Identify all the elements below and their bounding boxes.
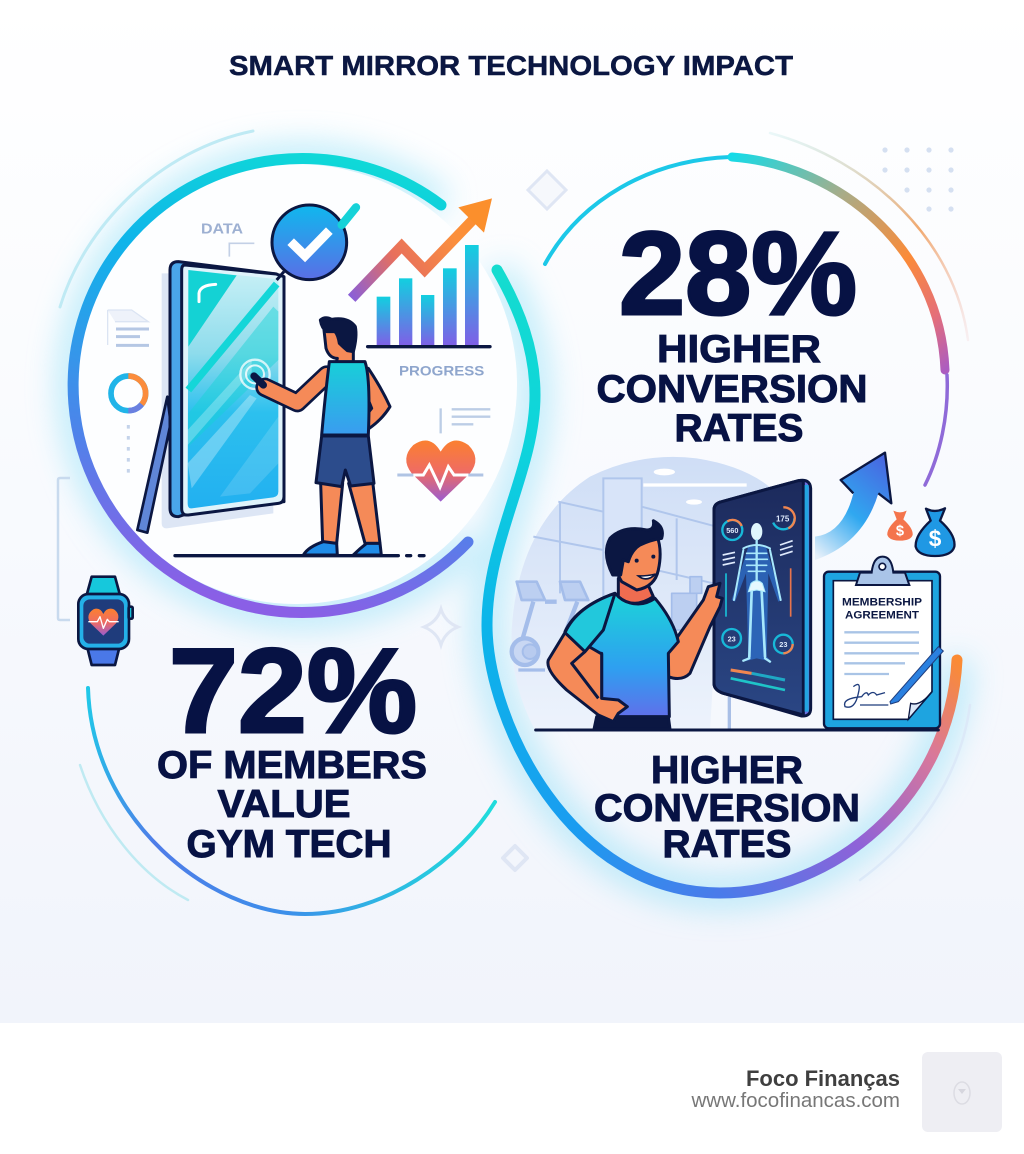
label: PROGRESS: PROGRESS	[399, 362, 484, 378]
gauge lower left	[722, 629, 741, 648]
soft glow behind rings	[73, 158, 957, 893]
S curve ring	[487, 270, 957, 893]
arc: outer faint left	[60, 131, 253, 307]
decorative shapes	[58, 171, 566, 870]
tablet readouts	[722, 507, 795, 690]
tablet edge	[801, 485, 813, 712]
small diamond	[503, 846, 527, 870]
data ticks	[723, 541, 793, 565]
label: DATA: DATA	[201, 222, 243, 238]
shorts band	[594, 717, 670, 729]
stat label: higher conversion rates lower: HIGHER	[651, 749, 803, 792]
raised arm	[667, 583, 722, 679]
arc: left circle ring	[73, 158, 468, 612]
text lines	[441, 408, 490, 433]
face	[615, 535, 660, 590]
gauge lower right: 23	[779, 640, 787, 649]
clipboard	[824, 557, 943, 728]
arm reaching	[254, 375, 327, 403]
treadmills and equipment	[512, 577, 702, 670]
gym background	[512, 457, 777, 730]
footer brand name: Foco Finanças	[746, 1066, 900, 1091]
mirror shadow	[162, 273, 273, 528]
dotted line	[124, 425, 133, 480]
hip arm	[548, 633, 627, 722]
ceiling lights	[654, 469, 702, 505]
stat: 72%: 72%	[169, 624, 417, 758]
tablet stand	[724, 697, 734, 729]
figure: man at mirror	[303, 318, 390, 555]
pen	[890, 647, 943, 704]
inner arm line	[572, 652, 598, 698]
dot grid	[882, 147, 954, 212]
arc: upper right thick	[732, 157, 945, 370]
stat: 28%: 28%	[619, 208, 857, 340]
back arm	[362, 368, 390, 429]
arrow: growth	[815, 453, 891, 560]
hair	[606, 521, 662, 575]
gauge left: 560	[726, 526, 738, 535]
clipboard: AGREEMENT	[845, 609, 919, 621]
digital tablet	[714, 480, 811, 716]
skeleton figure	[732, 523, 782, 662]
agreement lines	[844, 632, 919, 674]
stat label: higher conversion rates upper	[596, 328, 868, 450]
diamond top	[528, 171, 566, 209]
bracket	[229, 243, 254, 257]
smile	[638, 574, 656, 579]
sleeve	[565, 593, 615, 652]
eyes	[635, 555, 655, 563]
touch rings	[240, 360, 270, 389]
mirror	[170, 262, 284, 517]
footer url: www.focofinancas.com	[690, 1089, 900, 1112]
panel: gym trainer illustration	[512, 453, 954, 730]
signature	[845, 684, 888, 707]
icon: large money bag	[916, 508, 954, 556]
stat label: members value gym tech: VALUE	[218, 783, 350, 826]
left circle fill	[75, 164, 517, 604]
hair	[320, 318, 356, 352]
shoes	[303, 542, 337, 555]
icon: donut	[111, 376, 146, 411]
stat label: higher conversion rates lower	[594, 749, 860, 866]
arc: outer faint right	[770, 133, 968, 340]
decorative arcs	[60, 131, 970, 914]
icon: small money bag: $	[896, 523, 904, 539]
floor line	[536, 725, 938, 734]
neck	[618, 578, 653, 603]
gym windows	[533, 478, 747, 617]
chart baseline	[368, 342, 490, 352]
gauge lower right	[774, 635, 793, 653]
star sparkle	[424, 609, 458, 645]
stat label: members value gym tech	[157, 744, 427, 866]
icon: smart watch	[78, 577, 133, 665]
arc: upper right tail	[925, 375, 947, 485]
clipboard title: MEMBERSHIP	[842, 597, 922, 609]
neck and face	[324, 330, 353, 363]
gauge left	[722, 520, 742, 540]
bar chart	[377, 245, 479, 346]
stat label: members value gym tech: GYM TECH	[186, 823, 392, 866]
title: SMART MIRROR TECHNOLOGY IMPACT	[229, 50, 793, 81]
legs	[321, 483, 343, 543]
icon: check badge	[272, 205, 356, 280]
floor line	[175, 551, 424, 561]
gauge right: 175	[776, 514, 790, 523]
footer band	[0, 1023, 1024, 1154]
stat label: members value gym tech: OF MEMBERS	[157, 744, 427, 787]
trainer figure	[548, 521, 722, 729]
mirror stand	[137, 397, 171, 533]
panel: smart mirror illustration	[108, 198, 492, 556]
teal glass panes	[188, 270, 278, 447]
icon: document	[108, 310, 149, 345]
stat label: higher conversion rates upper: CONVERSION	[596, 368, 868, 411]
stat label: higher conversion rates upper: RATES	[674, 407, 804, 450]
gauge right	[772, 507, 795, 529]
icon: large money bag: $	[929, 526, 942, 552]
corner highlight	[199, 284, 216, 302]
mirror screen	[188, 270, 278, 508]
icon: small money bag	[887, 511, 913, 541]
t-shirt	[565, 593, 678, 717]
arc: lower right faint	[860, 705, 970, 880]
bracket left	[58, 478, 70, 620]
stat label: higher conversion rates lower: RATES	[662, 823, 792, 866]
stat label: higher conversion rates lower: CONVERSION	[594, 787, 860, 830]
arc: upper right thin	[545, 157, 730, 264]
stat label: higher conversion rates upper: HIGHER	[657, 328, 821, 371]
arrow: trend	[352, 198, 492, 298]
glass reflections	[188, 360, 278, 497]
arc: lower left faint	[80, 765, 188, 900]
gauge lower left: 23	[728, 634, 736, 643]
teal streak	[188, 284, 277, 390]
tank top	[322, 362, 369, 435]
arc: lower left	[88, 688, 495, 914]
footer logo tile	[922, 1052, 1002, 1132]
icon: heart	[397, 440, 483, 502]
shorts	[316, 436, 374, 487]
